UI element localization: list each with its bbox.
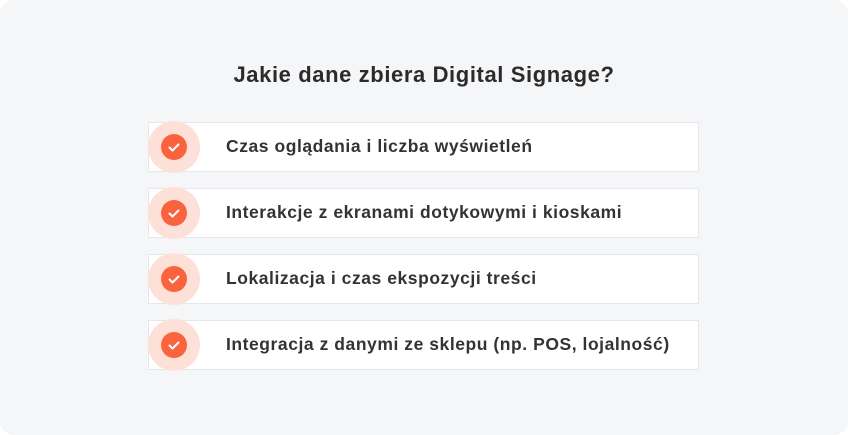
- item 1: Czas oglądania i liczba wyświetleń: [226, 136, 533, 156]
- item 1: [148, 122, 699, 172]
- item 2: Interakcje z ekranami dotykowymi i kioskami: [226, 202, 622, 222]
- title: Jakie dane zbiera Digital Signage?: [233, 62, 615, 87]
- item 4: Integracja z danymi ze sklepu (np. POS, lojalność): [226, 334, 670, 354]
- item 3: [148, 254, 699, 304]
- item 2: [148, 188, 699, 238]
- item 3: Lokalizacja i czas ekspozycji treści: [226, 268, 537, 288]
- item 4: [148, 320, 699, 370]
